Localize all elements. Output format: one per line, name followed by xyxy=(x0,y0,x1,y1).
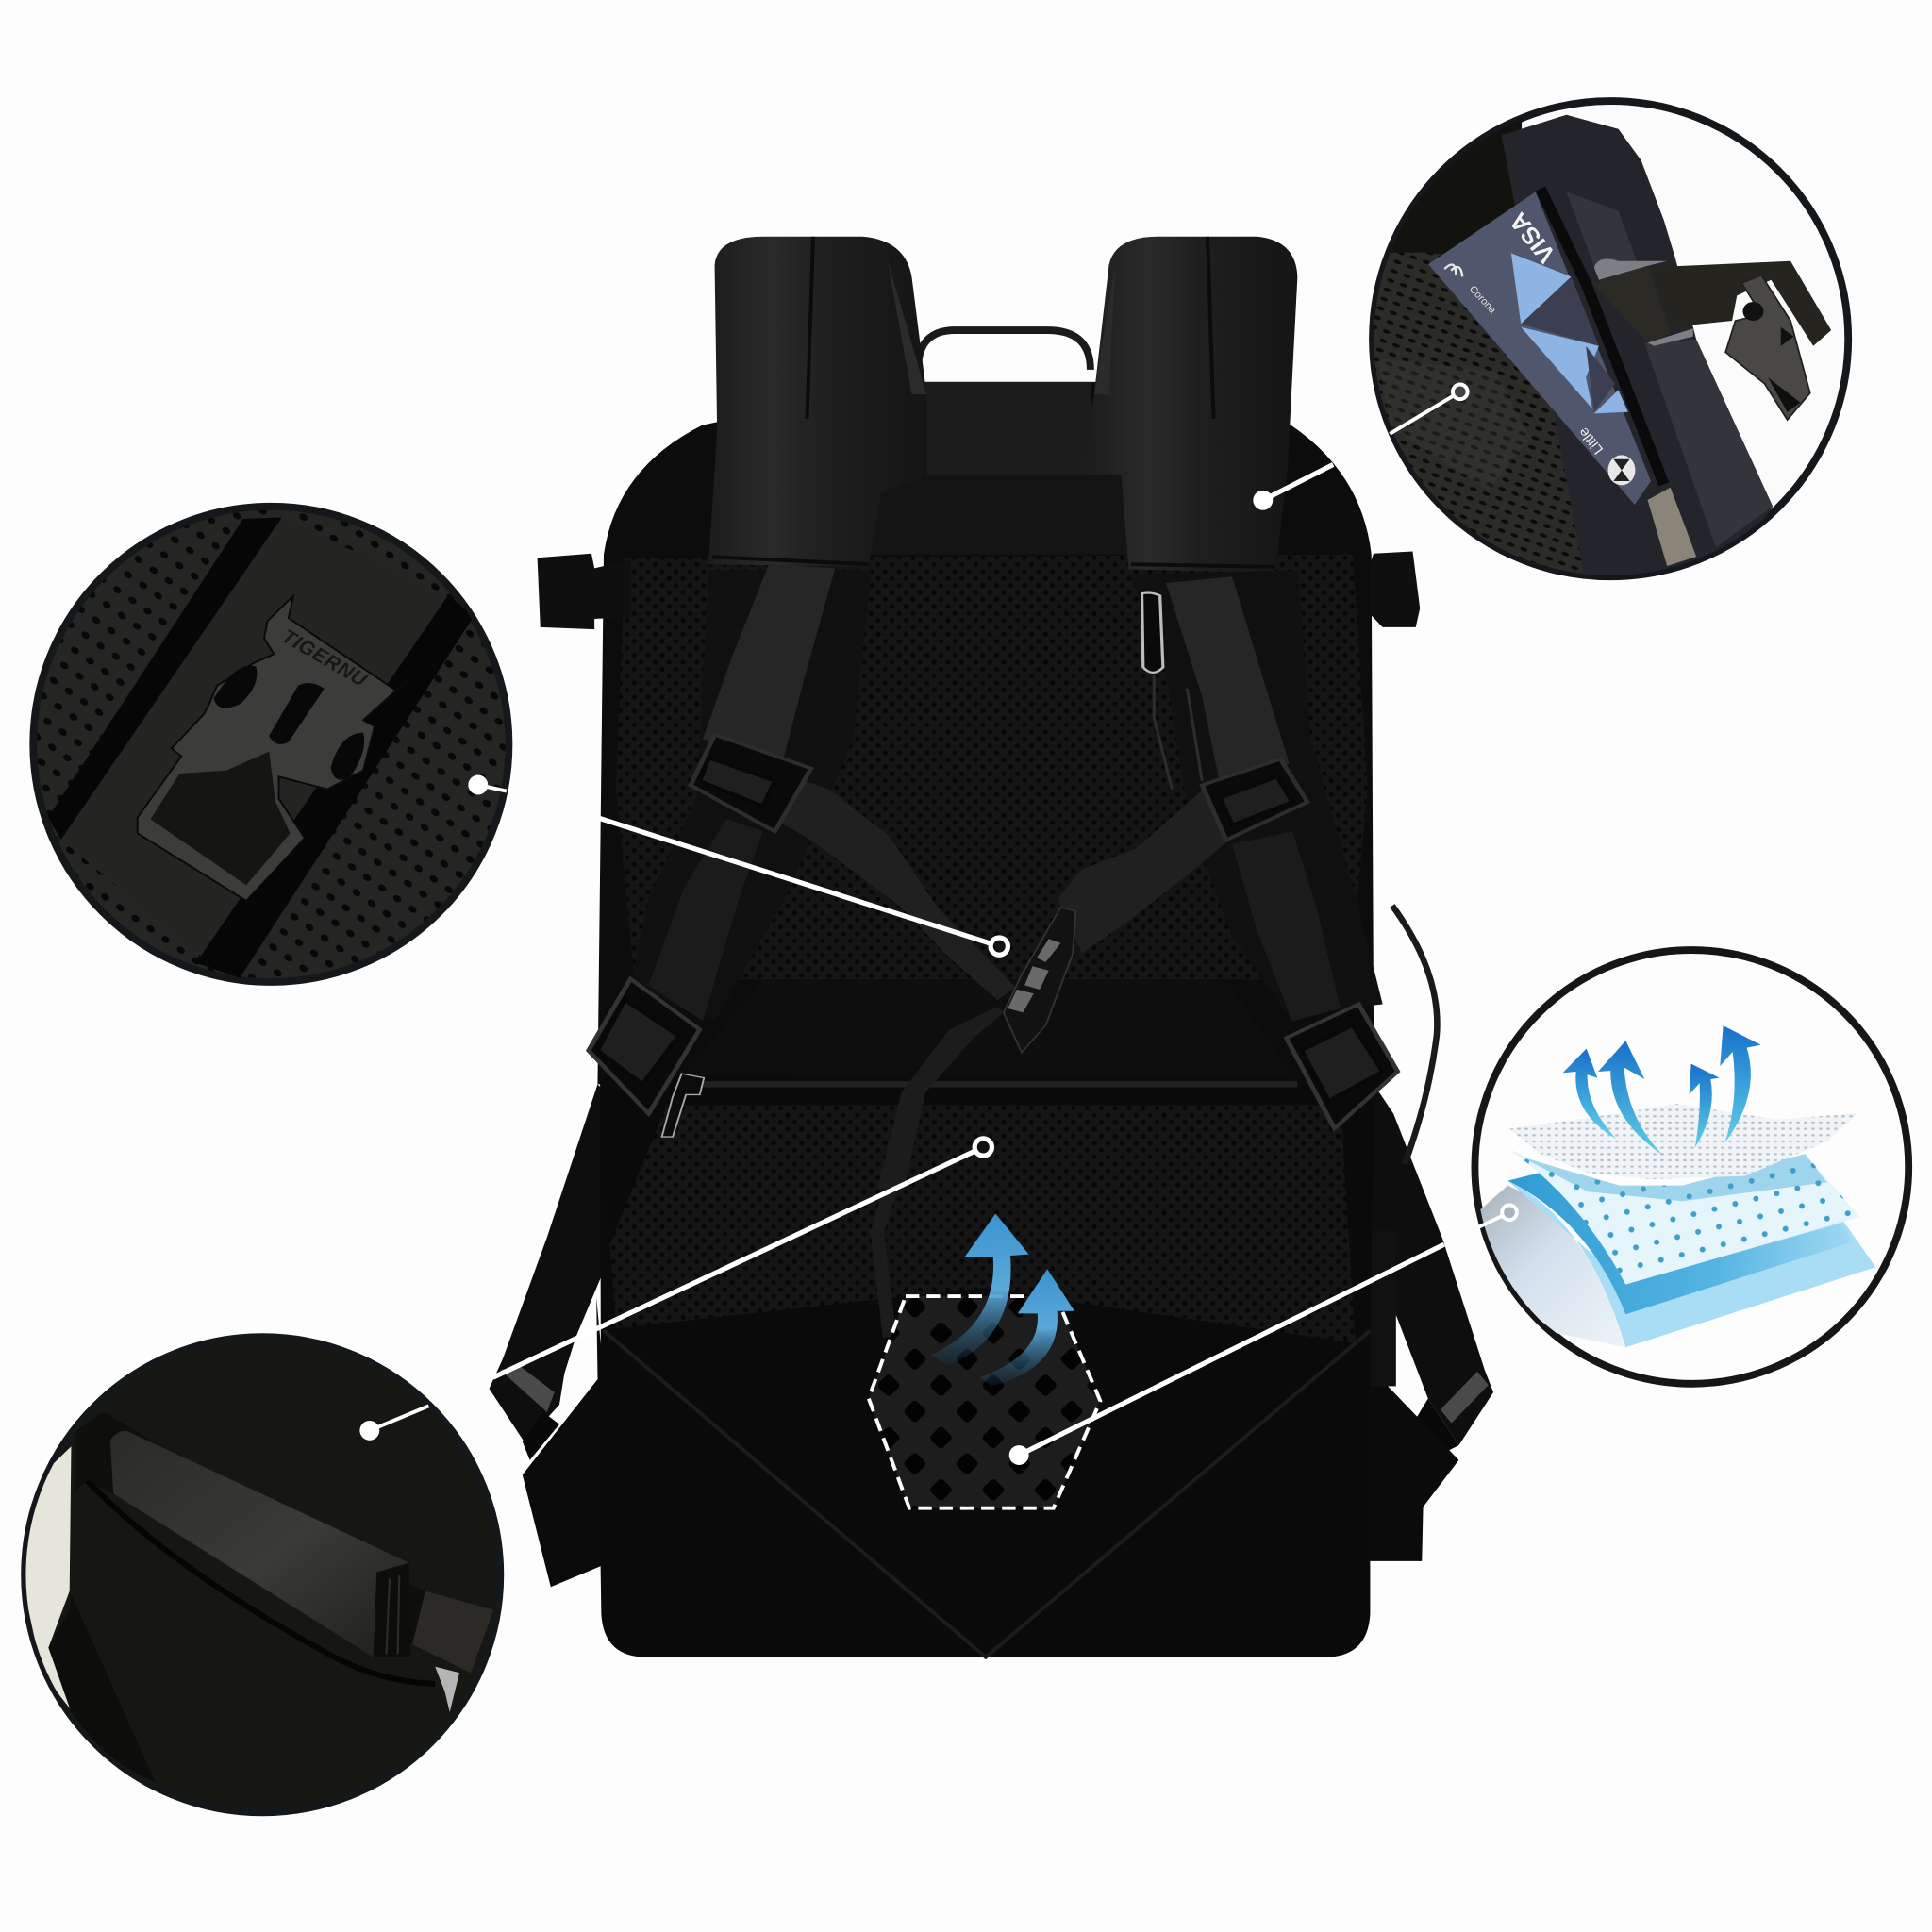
right webbing lower xyxy=(1232,831,1341,1021)
callout dot xyxy=(1390,385,1468,434)
lower mesh panel xyxy=(610,1106,1356,1343)
leader line: card pocket xyxy=(1253,464,1333,510)
mesh background xyxy=(1374,253,1584,574)
lower zipper pull xyxy=(662,1074,704,1137)
V seams on lower panel xyxy=(604,1331,1370,1657)
strap creases xyxy=(712,237,1275,567)
webbing band xyxy=(61,517,448,956)
callout circle: cooling foam xyxy=(1469,950,1908,1384)
lower straps and hardware xyxy=(538,552,1420,1189)
bank card: VISA xyxy=(1505,208,1561,267)
soft shadow xyxy=(1469,1186,1625,1347)
light background sliver xyxy=(25,1446,72,1709)
backpack xyxy=(490,237,1493,1657)
pocket strap body xyxy=(1502,115,1773,585)
ribbed webbing upper xyxy=(1566,192,1638,271)
grey strap trims xyxy=(500,1365,1489,1424)
leather wallet xyxy=(110,1431,410,1657)
adjuster lower left xyxy=(589,979,700,1114)
left webbing lower xyxy=(649,819,763,1021)
olive mesh highlight xyxy=(1378,358,1531,491)
top collar xyxy=(912,382,1096,475)
hanging strap end xyxy=(877,1188,891,1337)
adjuster lower right xyxy=(1287,1004,1398,1128)
buckle: TIGERNU xyxy=(278,625,371,691)
upper back panel mesh xyxy=(616,555,1368,979)
callout circle: card pocket xyxy=(1361,98,1848,591)
zipper track xyxy=(1541,189,1664,484)
lower left side strap xyxy=(490,1084,657,1442)
zipper track xyxy=(1154,675,1202,790)
adjuster upper right xyxy=(1202,759,1307,840)
zipper pull upper xyxy=(1142,592,1163,673)
blue tint xyxy=(1522,1154,1827,1201)
zipper pull xyxy=(435,1667,459,1712)
callout circle: hidden pocket xyxy=(23,1337,500,1812)
left pad xyxy=(630,571,872,1021)
adjuster upper left xyxy=(691,735,811,831)
left side tab xyxy=(538,554,630,629)
pocket zipper line xyxy=(88,1481,435,1684)
bank card: Corona xyxy=(1467,284,1499,316)
horizontal zipper xyxy=(702,1082,1297,1087)
callout dot xyxy=(468,775,507,794)
zipper pull xyxy=(1648,488,1696,566)
leader line: breathable foam xyxy=(1009,1244,1444,1465)
sternum buckle xyxy=(1004,908,1075,1053)
side edge xyxy=(75,1412,425,1644)
deep blue band xyxy=(1507,1173,1852,1314)
icon: blue airflow arrows xyxy=(1563,1025,1761,1156)
light blue base sheet xyxy=(1507,1181,1875,1347)
top yoke panel xyxy=(838,475,1134,555)
hexagon mesh xyxy=(869,1296,1100,1508)
callout circle: buckle closeup xyxy=(33,507,508,982)
dark groove right xyxy=(194,594,474,978)
bank card xyxy=(1428,192,1651,505)
main upper body xyxy=(597,382,1374,1084)
bank card: Little xyxy=(1576,425,1607,457)
right shoulder strap top xyxy=(1084,237,1297,573)
leader line: buckle xyxy=(595,817,1008,955)
dark groove left xyxy=(48,517,282,840)
metal hook xyxy=(1725,275,1810,420)
left triangular wing xyxy=(523,1365,608,1587)
icon: airflow arrows xyxy=(930,1214,1074,1386)
webbing strap tail xyxy=(1651,261,1831,346)
dark upper-left background xyxy=(1391,120,1523,255)
strap connectors xyxy=(523,1398,1458,1460)
sternum strap right xyxy=(1058,785,1229,954)
callout dot xyxy=(359,1406,429,1441)
left side dark strap xyxy=(48,1594,156,1783)
plastic grey holder xyxy=(1594,258,1693,346)
perforated sheet xyxy=(1509,1149,1860,1285)
callout dot xyxy=(1478,1205,1517,1227)
left webbing upper xyxy=(703,564,835,768)
right triangular wing xyxy=(1368,1365,1458,1561)
breathable hexagon panel xyxy=(869,1214,1100,1508)
left shoulder strap top xyxy=(708,237,926,567)
hanging strap xyxy=(877,1007,1004,1189)
white mesh top xyxy=(1509,1104,1858,1179)
right narrow edge strip xyxy=(1365,1230,1396,1386)
perforation dots xyxy=(1524,1158,1851,1274)
inner strap lining xyxy=(887,258,1115,394)
side cable xyxy=(1392,906,1437,1164)
right side tab xyxy=(1371,552,1420,627)
ribbed webbing lower xyxy=(1644,340,1773,547)
webbing strap loop xyxy=(1592,266,1671,342)
right webbing upper xyxy=(1166,576,1290,785)
lower right side strap xyxy=(1368,1084,1493,1445)
top handle xyxy=(918,330,1091,370)
right pad xyxy=(1130,571,1383,1021)
webbing strap xyxy=(412,1591,493,1673)
sternum strap left xyxy=(781,776,1016,1000)
leader line: hidden pocket xyxy=(492,1139,991,1377)
buckle xyxy=(138,596,412,901)
lower body xyxy=(596,1075,1374,1657)
waist band xyxy=(684,981,1292,1074)
